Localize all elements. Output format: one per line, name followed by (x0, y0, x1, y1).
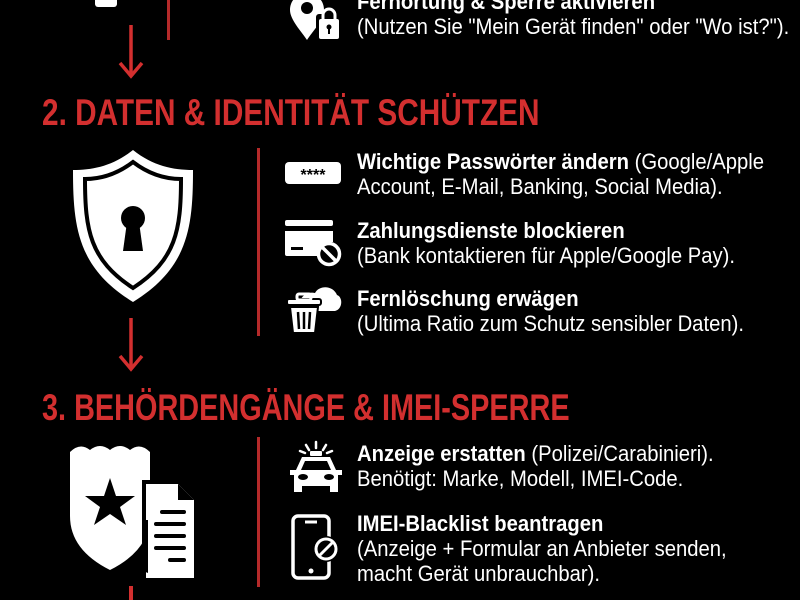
text: Fernlöschung: (Ultima Ratio zum Schutz sensibler Daten). (357, 311, 744, 336)
icon: credit card blocked (285, 220, 342, 266)
icon: phone blocked (291, 514, 338, 580)
arrow 3 stub (129, 586, 132, 600)
icon: top phone remnant (95, 0, 117, 7)
heading 2: 2. DATEN & IDENTITÄT SCHÜTZEN (42, 92, 540, 133)
divider line section 2 (257, 148, 260, 336)
divider line top (167, 0, 170, 40)
text: IMEI-Blacklist: IMEI-Blacklist beantragen (357, 511, 603, 536)
icon: police badge with document (70, 446, 194, 578)
text: Zahlungsdienste: Zahlungsdienste blockieren (357, 218, 625, 243)
text: Passwörter: Wichtige Passwörter ändern (Google/Apple (357, 149, 764, 174)
divider line section 3 (257, 437, 260, 587)
icon: password (285, 162, 341, 184)
text: IMEI-Blacklist (357, 511, 727, 586)
icon: location pin with lock (290, 0, 339, 40)
arrow 2 (118, 318, 144, 372)
heading 3: 3. BEHÖRDENGÄNGE & IMEI-SPERRE (42, 387, 570, 428)
text: Anzeige erstatten: Anzeige erstatten (Polizei/Carabinieri). (357, 441, 714, 466)
text: Zahlungsdienste (357, 218, 735, 268)
icon: shield with keyhole (73, 150, 193, 302)
icon: password: **** (301, 167, 326, 184)
arrow 1 (118, 25, 144, 79)
text: Fernlöschung: Fernlöschung erwägen (357, 286, 579, 311)
text: IMEI-Blacklist: (Anzeige + Formular an Anbieter senden, (357, 536, 727, 561)
text: Anzeige erstatten (357, 441, 714, 491)
icon: police car (290, 440, 342, 492)
text: Passwörter: Account, E-Mail, Banking, Social Media). (357, 174, 723, 199)
icon: cloud trash (288, 287, 342, 332)
text: Passwörter (357, 149, 764, 199)
text: Fernlöschung (357, 286, 744, 336)
text: IMEI-Blacklist: macht Gerät unbrauchbar). (357, 561, 600, 586)
text: Zahlungsdienste: (Bank kontaktieren für Apple/Google Pay). (357, 243, 735, 268)
text: Anzeige erstatten: Benötigt: Marke, Modell, IMEI-Code. (357, 466, 683, 491)
text: item Fernortung: (Nutzen Sie "Mein Gerät finden" oder "Wo ist?"). (357, 14, 789, 39)
text: item Fernortung (357, 0, 789, 39)
